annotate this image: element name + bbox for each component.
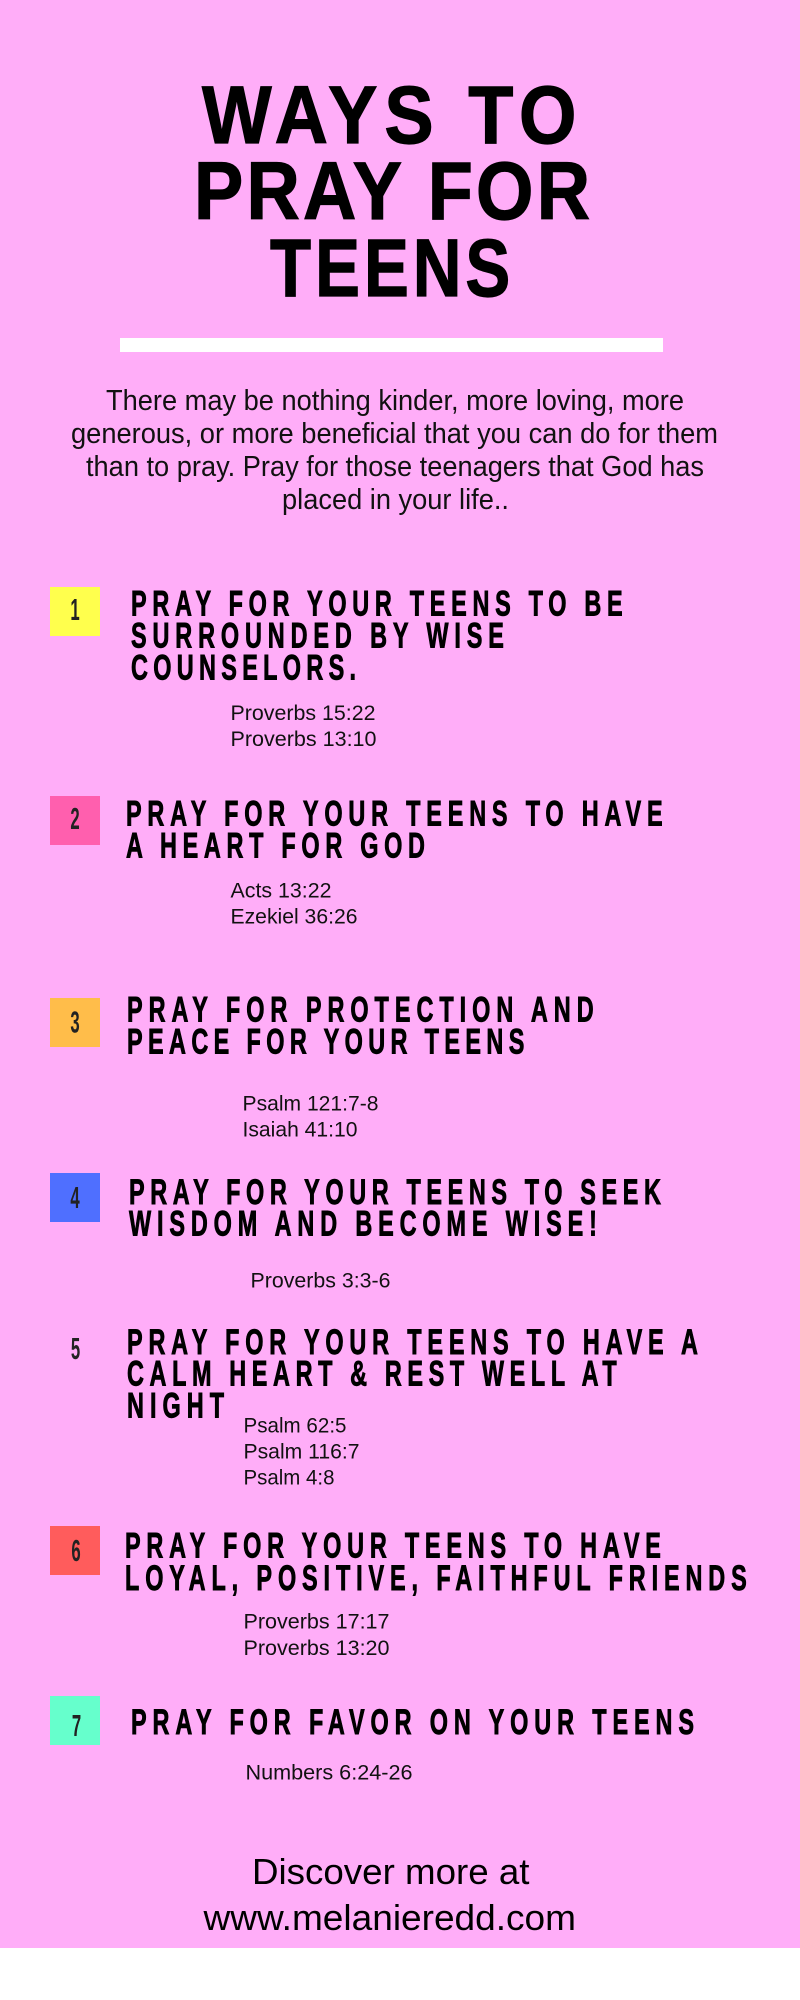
intro text: There may be nothing kinder, more loving, more [106,385,684,417]
number badge 1: 1 [70,593,80,627]
heading 4: PRAY FOR YOUR TEENS TO SEEK [129,1173,661,1212]
heading 4 [129,1173,661,1244]
heading 1 [131,585,623,688]
scripture references 3 [242,1092,379,1142]
heading 5: CALM HEART & REST WELL AT [127,1355,617,1394]
number badge 6: 6 [71,1534,81,1568]
number badge 7: 7 [72,1709,81,1743]
item 7 [50,1696,694,1785]
heading 3: PEACE FOR YOUR TEENS [127,1023,524,1062]
scripture references 1: Proverbs 15:22 [230,701,376,725]
heading 7: PRAY FOR FAVOR ON YOUR TEENS [131,1703,694,1742]
scripture references 5: Psalm 62:5 [244,1414,347,1438]
footer call to action [202,1851,576,1938]
scripture references 3: Psalm 121:7-8 [242,1092,379,1116]
scripture references 2: Ezekiel 36:26 [230,905,358,929]
intro text: than to pray. Pray for those teenagers that God has [86,451,704,483]
number badge 4 [50,1173,100,1222]
scripture reference 4: Proverbs 3:3-6 [250,1269,391,1293]
scripture references 5: Psalm 116:7 [244,1440,360,1464]
scripture references 6: Proverbs 13:20 [244,1636,390,1660]
intro text [71,385,718,516]
scripture references 1: Proverbs 13:10 [230,727,377,751]
footer call to action: Discover more at [252,1851,530,1892]
heading 5: PRAY FOR YOUR TEENS TO HAVE A [127,1323,698,1362]
number badge 7 [50,1696,100,1745]
scripture references 6 [244,1610,390,1660]
heading 3: PRAY FOR PROTECTION AND [127,991,594,1030]
number badge 3: 3 [70,1005,80,1040]
item 1 [50,585,623,751]
scripture references 2: Acts 13:22 [230,879,332,903]
scripture references 1 [230,701,377,751]
scripture references 6: Proverbs 17:17 [244,1610,390,1634]
heading 5: NIGHT [127,1387,225,1426]
scripture references 3: Isaiah 41:10 [242,1118,358,1142]
title: TEENS [270,222,510,313]
item 5 [71,1323,698,1490]
number badge 4: 4 [70,1181,80,1215]
scripture references 2 [230,879,358,929]
heading 6 [125,1527,747,1598]
title: PRAY FOR [194,144,590,237]
item 4 [50,1173,661,1293]
white divider bar [120,338,663,352]
heading 2 [126,795,663,866]
item 6 [50,1526,747,1660]
title: WAYS TO [202,68,576,161]
item 3 [50,991,594,1142]
footer call to action: www.melanieredd.com [202,1897,576,1938]
intro text: generous, or more beneficial that you can do for them [71,418,718,450]
heading 6: LOYAL, POSITIVE, FAITHFUL FRIENDS [125,1559,747,1598]
title [194,68,590,313]
number badge 6 [50,1526,100,1575]
heading 4: WISDOM AND BECOME WISE! [129,1205,597,1244]
number badge 2: 2 [70,802,80,836]
heading 1: SURROUNDED BY WISE [131,617,504,656]
intro text: placed in your life.. [282,484,509,516]
scripture references 5 [244,1414,360,1490]
heading 5 [127,1323,698,1426]
number badge 2 [50,796,100,845]
heading 1: PRAY FOR YOUR TEENS TO BE [131,585,623,624]
number badge 1 [50,587,100,636]
heading 3 [127,991,594,1062]
scripture reference 7: Numbers 6:24-26 [246,1761,413,1785]
item 2 [50,795,663,929]
heading 6: PRAY FOR YOUR TEENS TO HAVE [125,1527,661,1566]
heading 2: PRAY FOR YOUR TEENS TO HAVE [126,795,663,834]
number badge 3 [50,998,100,1047]
number 5: 5 [71,1332,80,1366]
scripture references 5: Psalm 4:8 [244,1466,335,1490]
heading 2: A HEART FOR GOD [126,827,425,866]
heading 1: COUNSELORS. [131,649,356,688]
